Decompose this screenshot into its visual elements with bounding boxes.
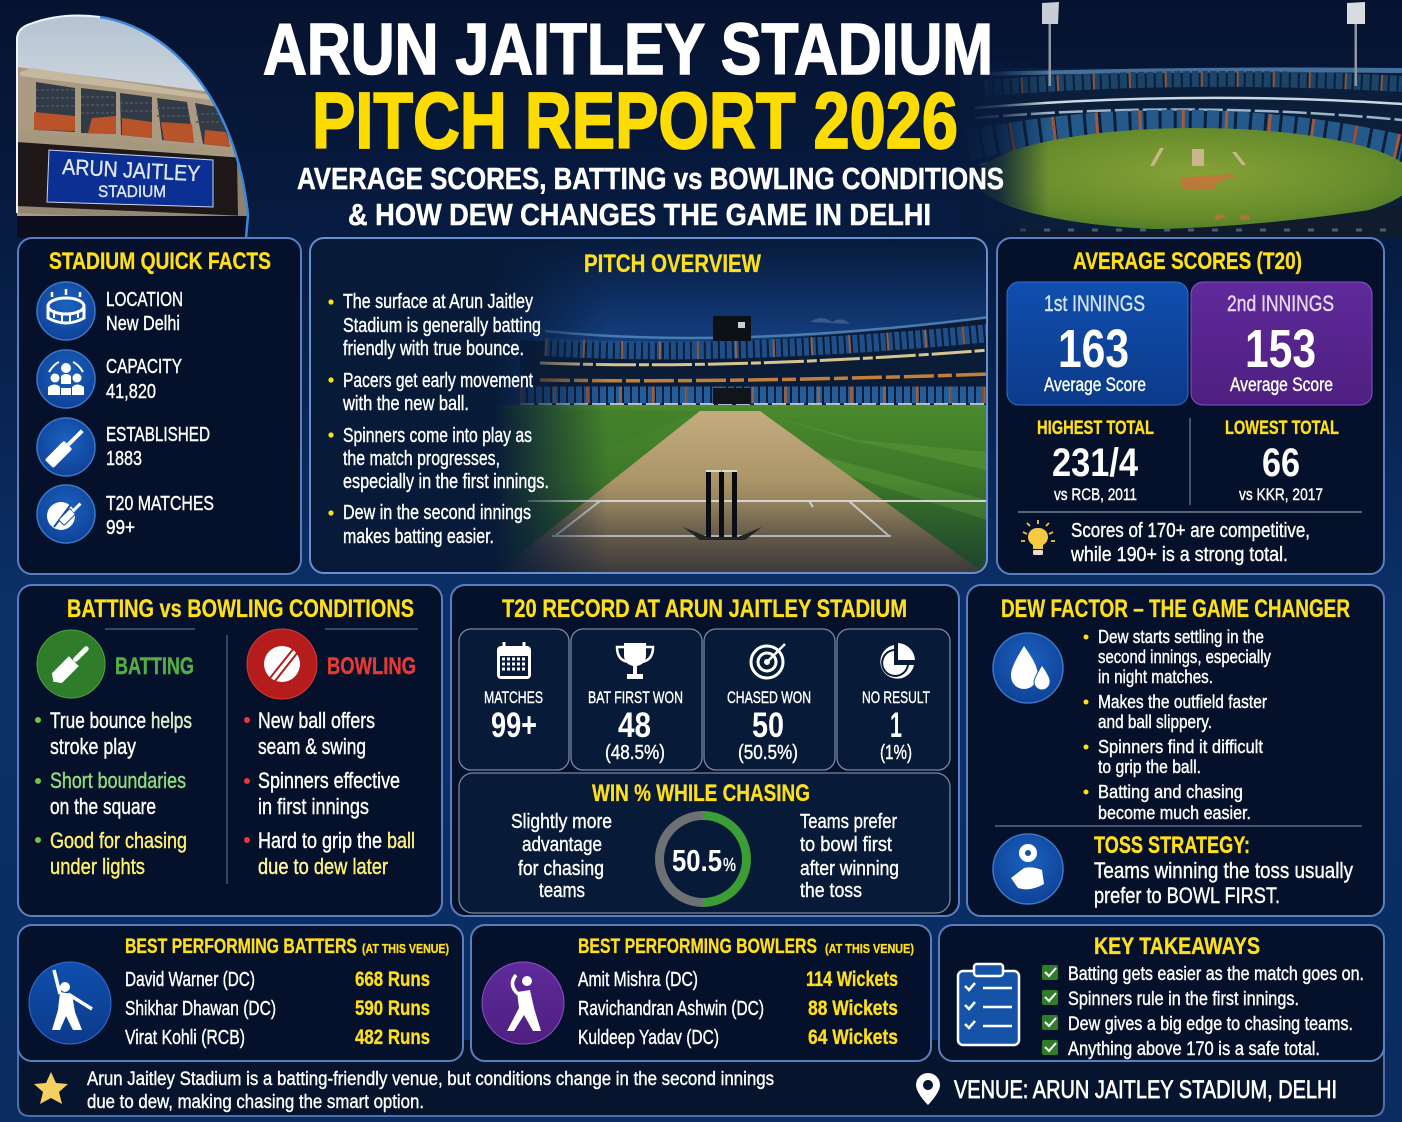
panel: stadium quick facts — [18, 238, 301, 574]
icon: light bulb — [1021, 520, 1055, 555]
donut chart: 50.5 percent: 50.5 — [672, 843, 722, 878]
fact: capacity — [106, 356, 182, 403]
fact: established — [106, 424, 210, 470]
list: bowling: seam & swing — [258, 734, 366, 759]
stat card: bat first won — [571, 629, 702, 770]
hero image: stadium at night — [960, 2, 1402, 240]
title — [263, 10, 993, 165]
list: takeaways — [1042, 964, 1364, 1060]
list: takeaways: Anything above 170 is a safe total. — [1068, 1039, 1320, 1060]
list: bowlers: 114 Wickets — [806, 968, 898, 991]
panel: best batters — [18, 925, 463, 1061]
card: 2nd innings: 153 — [1245, 319, 1316, 379]
bullets: pitch overview: Dew in the second innings — [343, 502, 531, 524]
list: batting: Good for chasing — [50, 828, 187, 853]
stat card: no result: NO RESULT — [862, 688, 930, 707]
bullets: pitch overview — [328, 291, 549, 548]
stat: highest total: HIGHEST TOTAL — [1037, 418, 1154, 439]
stat: lowest total: LOWEST TOTAL — [1225, 418, 1339, 439]
fact: location — [106, 289, 183, 335]
fact: t20 matches — [106, 493, 214, 539]
text: toss preference: Teams prefer — [800, 811, 897, 833]
list: dew effects: to grip the ball. — [1098, 757, 1201, 777]
summary text: due to dew, making chasing the smart option. — [87, 1092, 424, 1113]
icon: clipboard — [958, 964, 1019, 1045]
summary text: Arun Jaitley Stadium is a batting-friendly venue, but conditions change in the second innings — [87, 1069, 774, 1090]
stat: lowest total — [1225, 418, 1339, 504]
list: dew effects: in night matches. — [1098, 667, 1213, 687]
bullets: pitch overview: Spinners come into play as — [343, 425, 532, 447]
subtitle: & HOW DEW CHANGES THE GAME IN DELHI — [348, 197, 931, 232]
list: bowlers: Amit Mishra (DC) — [578, 969, 698, 991]
list: dew effects: Spinners find it difficult — [1098, 737, 1263, 757]
fact: t20 matches: T20 MATCHES — [106, 493, 214, 515]
stat: lowest total: 66 — [1262, 441, 1300, 485]
panel: pitch overview — [310, 238, 990, 575]
list: batting — [35, 708, 192, 879]
icon: map pin — [916, 1073, 940, 1105]
subtitle: AVERAGE SCORES, BATTING vs BOWLING CONDITIONS — [297, 161, 1004, 196]
text: toss preference: the toss — [800, 880, 862, 902]
icon: cricket bat — [37, 418, 95, 476]
icon: toss — [993, 834, 1063, 904]
donut chart: 50.5 percent — [660, 816, 746, 902]
panel: best bowlers — [471, 925, 931, 1061]
list: takeaways: Dew gives a big edge to chasing teams. — [1068, 1014, 1353, 1035]
icon: capacity people — [37, 350, 95, 408]
stat: highest total — [1037, 418, 1154, 504]
stumps — [683, 471, 762, 540]
list: bowling: in first innings — [258, 794, 369, 819]
heading: best batters: (AT THIS VENUE) — [362, 941, 449, 956]
heading: best bowlers: (AT THIS VENUE) — [825, 941, 914, 956]
sign board — [47, 150, 213, 207]
bullets: pitch overview: Stadium is generally batting — [343, 315, 541, 337]
stat: highest total: vs RCB, 2011 — [1054, 485, 1137, 504]
heading: quick facts: STADIUM QUICK FACTS — [49, 248, 271, 275]
footer bar — [18, 1040, 1384, 1116]
list: batters — [125, 968, 430, 1049]
title: ARUN JAITLEY STADIUM — [263, 10, 993, 90]
list: bowling — [244, 708, 415, 879]
list: bowlers: Ravichandran Ashwin (DC) — [578, 998, 764, 1020]
list: batting: True bounce helps — [50, 708, 192, 733]
icon: bowler silhouette — [482, 962, 564, 1044]
donut chart: 50.5 percent: % — [723, 855, 736, 875]
stat card: no result: 1 — [890, 706, 902, 745]
stat card: chased won: CHASED WON — [727, 688, 811, 707]
list: dew effects: become much easier. — [1098, 803, 1251, 823]
heading: pitch overview: PITCH OVERVIEW — [584, 250, 761, 278]
stat card: bat first won: BAT FIRST WON — [588, 688, 683, 707]
list: batters: David Warner (DC) — [125, 969, 255, 991]
card: 2nd innings — [1191, 282, 1372, 405]
bullets: pitch overview: The surface at Arun Jaitley — [343, 291, 533, 313]
list: bowlers: 88 Wickets — [808, 997, 898, 1020]
bullets: pitch overview: makes batting easier. — [343, 526, 494, 548]
icon: bowling — [247, 629, 317, 699]
summary text — [87, 1069, 774, 1113]
list: dew effects: Dew starts settling in the — [1098, 627, 1264, 647]
toss strategy — [1094, 832, 1353, 908]
fact: t20 matches: 99+ — [106, 517, 135, 539]
list: batting: Short boundaries — [50, 768, 186, 793]
list: dew effects: Makes the outfield faster — [1098, 692, 1267, 712]
text: toss preference: after winning — [800, 858, 899, 880]
list: batting: stroke play — [50, 734, 136, 759]
stadium entrance photo — [17, 15, 252, 240]
card: 1st innings — [1007, 282, 1188, 405]
fact: capacity: 41,820 — [106, 381, 156, 403]
bullets: pitch overview: especially in the first innings. — [343, 471, 549, 493]
tip text: Scores of 170+ are competitive, — [1071, 520, 1310, 542]
sign board: ARUN JAITLEY — [62, 154, 201, 186]
heading: key takeaways: KEY TAKEAWAYS — [1094, 933, 1260, 960]
sign board: STADIUM — [98, 182, 166, 201]
text: toss preference: to bowl first — [800, 834, 892, 856]
bullets: pitch overview: with the new ball. — [342, 393, 469, 415]
panel: batting vs bowling — [18, 585, 442, 916]
panel: average scores — [997, 238, 1384, 574]
icon: ball and bat — [37, 485, 95, 543]
bullets: pitch overview: the match progresses, — [343, 448, 500, 470]
list: bowling: Hard to grip the ball — [258, 828, 415, 853]
fact: established: ESTABLISHED — [106, 424, 210, 446]
stat card: chased won: (50.5%) — [738, 742, 798, 764]
tip text — [1070, 520, 1310, 566]
heading: batting vs bowling: BATTING vs BOWLING CONDITIONS — [67, 595, 414, 623]
fact: location: New Delhi — [106, 313, 180, 335]
list: batters: Virat Kohli (RCB) — [125, 1027, 245, 1049]
stat card: bat first won: (48.5%) — [605, 742, 665, 764]
icon: stadium — [37, 282, 95, 340]
list: batters: 590 Runs — [355, 997, 430, 1020]
stat card: bat first won: 48 — [618, 706, 651, 745]
list: bowling: Spinners effective — [258, 768, 400, 793]
heading: best batters: BEST PERFORMING BATTERS — [125, 935, 357, 958]
list: batters: Shikhar Dhawan (DC) — [125, 998, 276, 1020]
card: 2nd innings: 2nd INNINGS — [1227, 291, 1334, 316]
list: bowlers — [578, 968, 898, 1049]
list: bowlers: Kuldeep Yadav (DC) — [578, 1027, 719, 1049]
label: bowling: BOWLING — [327, 653, 416, 680]
bullets: pitch overview: Pacers get early movement — [343, 370, 533, 392]
list: takeaways: Spinners rule in the first innings. — [1068, 989, 1299, 1010]
panel: key takeaways — [939, 925, 1384, 1061]
stat card: matches — [459, 629, 569, 770]
bullets: pitch overview: friendly with true bounce. — [343, 338, 524, 360]
text: toss preference — [800, 811, 899, 902]
heading: average scores: AVERAGE SCORES (T20) — [1073, 248, 1302, 275]
text: chasing advantage — [511, 811, 612, 902]
floodlight right — [1347, 2, 1365, 86]
list: batting: on the square — [50, 794, 156, 819]
floodlight left — [1042, 2, 1059, 86]
icon: batter silhouette — [29, 962, 111, 1044]
list: dew effects — [1084, 627, 1271, 823]
list: batting: under lights — [50, 854, 145, 879]
fact: capacity: CAPACITY — [106, 356, 182, 378]
list: batters: 668 Runs — [355, 968, 430, 991]
card: win percent while chasing — [459, 773, 950, 913]
stat card: chased won: 50 — [752, 706, 784, 745]
stat card: no result: (1%) — [880, 742, 912, 764]
pitch illustration — [502, 247, 986, 572]
fact: location: LOCATION — [106, 289, 183, 311]
list: bowling: due to dew later — [258, 854, 388, 879]
card: 1st innings: Average Score — [1044, 375, 1146, 396]
list: dew effects: Batting and chasing — [1098, 782, 1243, 802]
text: chasing advantage: Slightly more — [511, 811, 612, 833]
toss strategy: Teams winning the toss usually — [1094, 858, 1353, 883]
list: bowlers: 64 Wickets — [808, 1026, 898, 1049]
tip text: while 190+ is a strong total. — [1070, 544, 1288, 566]
text: chasing advantage: advantage — [522, 834, 602, 856]
stat card: matches: 99+ — [491, 706, 537, 745]
stat: lowest total: vs KKR, 2017 — [1239, 485, 1323, 504]
card: 1st innings: 163 — [1058, 319, 1129, 379]
heading: best bowlers: BEST PERFORMING BOWLERS — [578, 935, 817, 958]
heading: t20 record: T20 RECORD AT ARUN JAITLEY STADIUM — [502, 595, 907, 623]
card: 1st innings: 1st INNINGS — [1044, 291, 1145, 316]
fact: established: 1883 — [106, 448, 142, 470]
list: bowling: New ball offers — [258, 708, 375, 733]
text: chasing advantage: teams — [539, 880, 585, 902]
icon: batting — [37, 630, 105, 698]
title: PITCH REPORT 2026 — [312, 76, 958, 165]
icon: water drops — [993, 633, 1063, 703]
panel: t20 record — [451, 585, 959, 916]
list: dew effects: and ball slippery. — [1098, 712, 1212, 732]
subtitle — [297, 161, 1004, 232]
stat card: chased won — [704, 629, 835, 770]
stat card: matches: MATCHES — [484, 688, 543, 707]
toss strategy: prefer to BOWL FIRST. — [1094, 883, 1280, 908]
label: batting: BATTING — [115, 653, 194, 680]
list: batters: 482 Runs — [355, 1026, 430, 1049]
card: 2nd innings: Average Score — [1230, 375, 1333, 396]
card: win percent while chasing: WIN % WHILE CHASING — [592, 780, 810, 807]
toss strategy: TOSS STRATEGY: — [1094, 832, 1250, 859]
icon: star — [34, 1072, 68, 1104]
text: chasing advantage: for chasing — [518, 858, 604, 880]
stat: highest total: 231/4 — [1052, 441, 1139, 485]
panel: dew factor — [967, 585, 1384, 916]
stat card: no result — [837, 629, 950, 770]
list: dew effects: second innings, especially — [1098, 647, 1271, 667]
